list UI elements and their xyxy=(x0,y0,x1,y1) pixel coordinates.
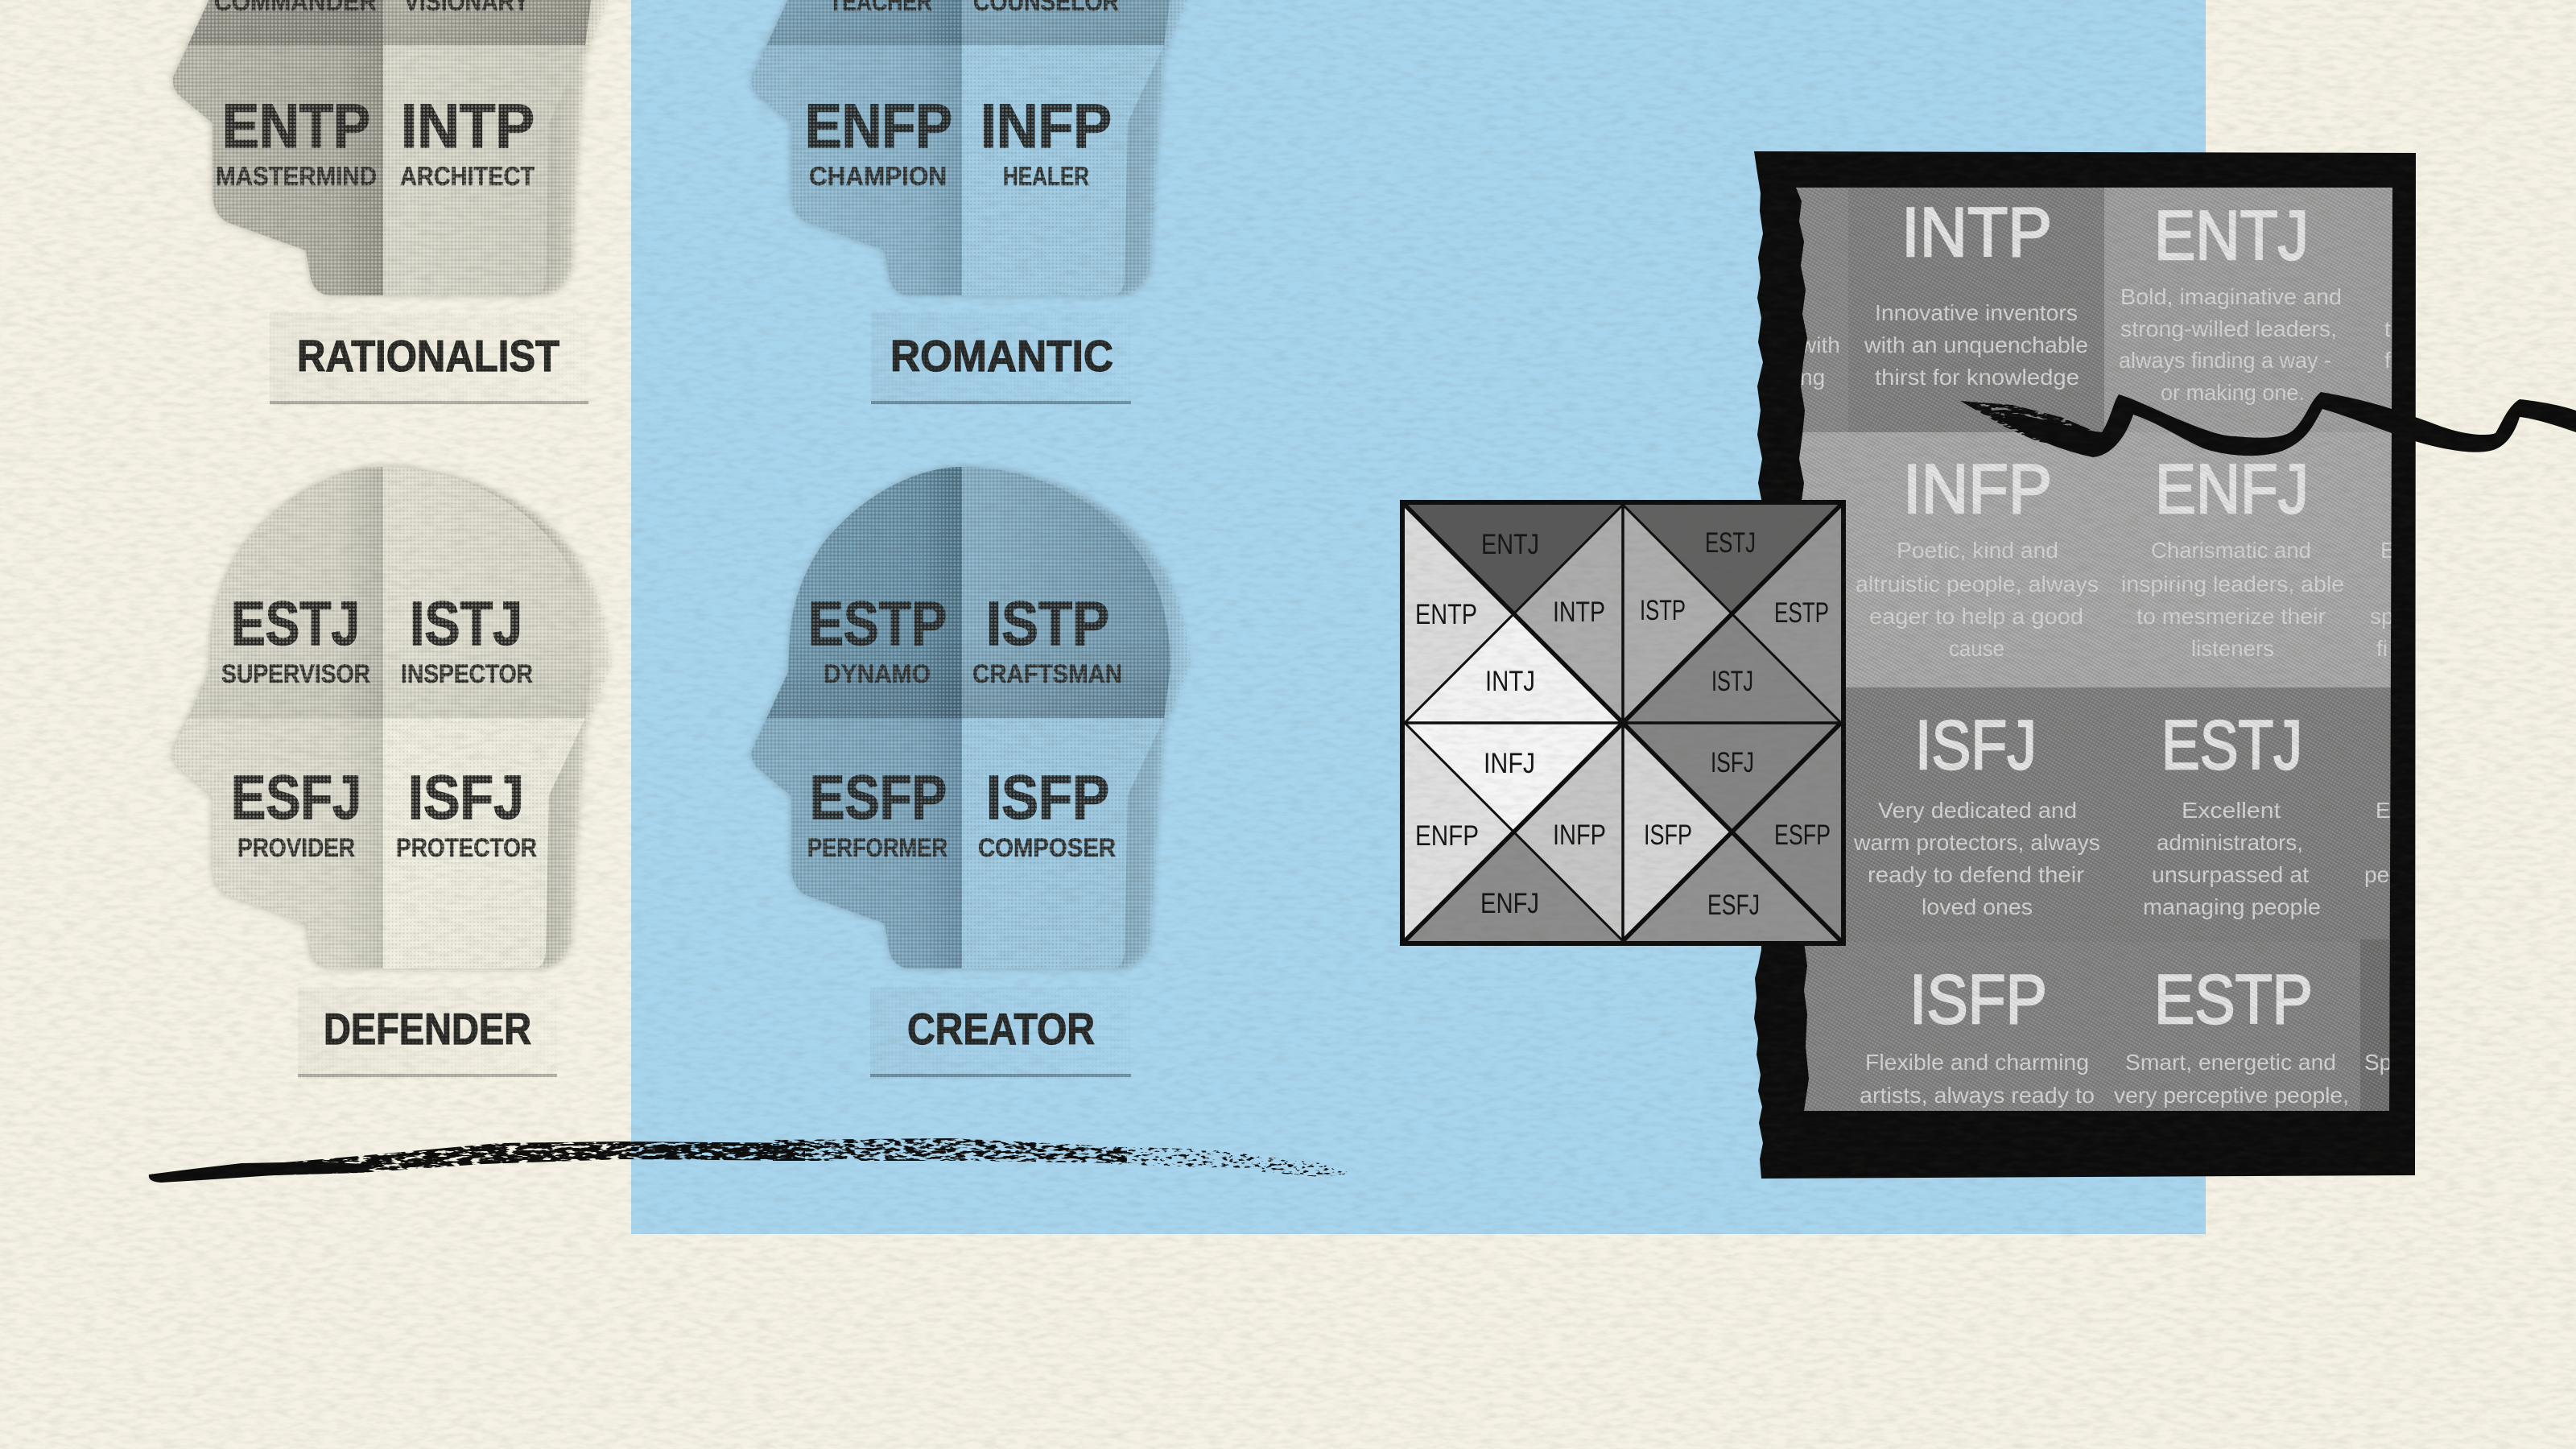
card: ISFJ: ISFJ xyxy=(1915,707,2037,784)
card: ENFJ: Charismatic and xyxy=(2151,538,2311,563)
label plate: DEFENDER: DEFENDER xyxy=(324,1004,531,1054)
type: INFP: INFP xyxy=(980,92,1112,161)
panel: romantic xyxy=(740,0,1203,405)
role: DYNAMO: DYNAMO xyxy=(824,659,931,688)
card: INFP xyxy=(1856,451,2099,661)
card: ISFJ: warm protectors, always xyxy=(1853,830,2100,855)
card: INFP: cause xyxy=(1949,636,2004,661)
card fragment: cut-off right column: fi xyxy=(2376,636,2388,661)
card: ESTP: ESTP xyxy=(2154,961,2313,1038)
head: rationalist silhouette xyxy=(161,0,625,303)
card: ENFJ: inspiring leaders, able xyxy=(2121,572,2344,597)
card: ESTP xyxy=(2114,961,2349,1108)
card: INTP: thirst for knowledge xyxy=(1875,365,2079,390)
role: ARCHITECT: ARCHITECT xyxy=(400,162,535,191)
background panel: blue sheet xyxy=(631,0,2206,1234)
card: ISFP: Flexible and charming xyxy=(1865,1050,2089,1075)
chart: 16-type triangle matrix xyxy=(1400,500,1846,946)
card: ESTP: very perceptive people, xyxy=(2114,1083,2349,1108)
quadrant: top right triangles xyxy=(1623,505,1841,723)
card fragment: cut-off right column: E xyxy=(2380,538,2396,563)
label plate: RATIONALIST xyxy=(270,312,588,405)
card: INTP: INTP xyxy=(1901,194,2052,271)
panel: torn black card xyxy=(1754,151,2416,1179)
card: ISFJ: Very dedicated and xyxy=(1878,798,2077,823)
card: ENTJ: Bold, imaginative and xyxy=(2120,284,2342,309)
quadrant: top left triangles xyxy=(1405,505,1623,723)
role: SUPERVISOR: SUPERVISOR xyxy=(221,659,370,688)
role: CRAFTSMAN: CRAFTSMAN xyxy=(972,659,1122,688)
head: romantic silhouette xyxy=(740,0,1203,303)
card: INTP: Innovative inventors xyxy=(1875,300,2078,325)
head: defender silhouette xyxy=(161,459,625,976)
card: ESTJ: ESTJ xyxy=(2161,707,2302,784)
matrix label: ESTP: ESTP xyxy=(1774,597,1829,629)
role: COMPOSER: COMPOSER xyxy=(978,833,1116,862)
label plate: CREATOR: CREATOR xyxy=(907,1004,1095,1054)
matrix label: ISFP: ISFP xyxy=(1644,819,1692,851)
quadrant: bottom right triangles xyxy=(1623,723,1841,941)
role: PERFORMER: PERFORMER xyxy=(807,833,947,862)
role: CHAMPION: CHAMPION xyxy=(809,162,947,191)
card: INTP xyxy=(1864,194,2088,390)
card: ENFJ: listeners xyxy=(2191,636,2274,661)
card: ENTJ: always finding a way - xyxy=(2119,348,2331,373)
label plate: DEFENDER xyxy=(298,987,557,1079)
role: MASTERMIND: MASTERMIND xyxy=(216,162,377,191)
label plate: ROMANTIC: ROMANTIC xyxy=(890,331,1113,381)
panel: creator xyxy=(740,459,1203,1079)
matrix label: INFP: INFP xyxy=(1553,819,1606,851)
card fragment: cut-off left column: ng xyxy=(1800,365,1825,390)
matrix label: ESTJ: ESTJ xyxy=(1705,527,1756,559)
card fragment: cut-off right column: f xyxy=(2384,348,2391,373)
matrix label: ISTP: ISTP xyxy=(1640,595,1686,626)
quadrant: bottom left triangles xyxy=(1405,723,1623,941)
card: INFP: Poetic, kind and xyxy=(1897,538,2058,563)
matrix label: ENTP: ENTP xyxy=(1415,599,1477,630)
card backing: black torn sheet xyxy=(1754,151,2416,1179)
card: ESTJ: administrators, xyxy=(2157,830,2303,855)
label plate: RATIONALIST: RATIONALIST xyxy=(297,331,559,381)
type: ESTJ: ESTJ xyxy=(231,589,360,658)
card: ENFJ: to mesmerize their xyxy=(2136,604,2326,629)
role: PROTECTOR: PROTECTOR xyxy=(396,833,537,862)
type: ENTP: ENTP xyxy=(222,92,370,161)
card fragment: cut-off right column: Sp xyxy=(2364,1050,2392,1075)
card: INFP: eager to help a good xyxy=(1869,604,2083,629)
matrix label: INTJ: INTJ xyxy=(1485,666,1535,697)
card: INFP: altruistic people, always xyxy=(1856,572,2099,597)
card fragment: cut-off right column xyxy=(2364,316,2396,1075)
matrix label: ESFP: ESFP xyxy=(1774,819,1831,851)
card: ESTJ xyxy=(2143,707,2321,919)
matrix label: ISTJ: ISTJ xyxy=(1711,666,1753,697)
card: ESTJ: Excellent xyxy=(2182,798,2281,823)
type: ENFP: ENFP xyxy=(805,92,952,161)
type: ESFJ: ESFJ xyxy=(231,763,361,832)
card fragment: cut-off right column: t xyxy=(2384,316,2391,341)
card: ISFJ: loved ones xyxy=(1922,894,2033,919)
card: ENFJ xyxy=(2121,451,2344,661)
card: ESTJ: managing people xyxy=(2143,894,2321,919)
type: ISTP: ISTP xyxy=(986,589,1109,658)
type: ESTP: ESTP xyxy=(808,589,947,658)
role: INSPECTOR: INSPECTOR xyxy=(401,659,533,688)
card fragment: cut-off right column: E xyxy=(2376,798,2391,823)
matrix label: INFJ: INFJ xyxy=(1484,748,1535,779)
card: ENTJ xyxy=(2119,197,2342,405)
card: ESTP: Smart, energetic and xyxy=(2125,1050,2336,1075)
card: ISFP xyxy=(1860,961,2095,1108)
card: ISFJ: ready to defend their xyxy=(1868,862,2084,887)
brush stroke: wavy ink line xyxy=(1960,392,2576,457)
matrix label: ESFJ: ESFJ xyxy=(1707,890,1760,921)
card: INTP: with an unquenchable xyxy=(1864,332,2088,357)
matrix label: ENFP: ENFP xyxy=(1415,820,1479,852)
type: INTP: INTP xyxy=(401,92,535,161)
panel: rationalist xyxy=(161,0,625,405)
type: ESFP: ESFP xyxy=(810,763,947,832)
label plate: CREATOR xyxy=(870,987,1131,1079)
card: ENTJ: ENTJ xyxy=(2154,197,2309,275)
card: ENTJ: strong-willed leaders, xyxy=(2120,316,2337,341)
card: INFP: INFP xyxy=(1903,451,2052,528)
card: ENTJ: or making one. xyxy=(2161,380,2305,405)
brush stroke: dry horizontal ink sweep xyxy=(149,1138,1352,1183)
card: ISFP: ISFP xyxy=(1909,961,2047,1038)
role: PROVIDER: PROVIDER xyxy=(237,833,355,862)
card grid: type descriptions xyxy=(1787,181,2402,1115)
matrix label: ENFJ: ENFJ xyxy=(1480,888,1539,919)
matrix label: ENTJ: ENTJ xyxy=(1481,529,1539,560)
panel: defender xyxy=(161,459,625,1079)
matrix label: INTP: INTP xyxy=(1553,597,1605,628)
card: ESTJ: unsurpassed at xyxy=(2152,862,2309,887)
type: ISFP: ISFP xyxy=(986,763,1109,832)
card fragment: cut-off left column: with xyxy=(1799,332,1840,357)
label plate: ROMANTIC xyxy=(871,312,1131,405)
card: ISFP: artists, always ready to xyxy=(1860,1083,2095,1108)
card: ENFJ: ENFJ xyxy=(2155,451,2309,528)
card: ISFJ xyxy=(1853,707,2100,919)
type: ISTJ: ISTJ xyxy=(410,589,522,658)
card fragment: cut-off left column xyxy=(1799,332,1840,390)
matrix label: ISFJ: ISFJ xyxy=(1711,747,1754,778)
card fragment: cut-off right column: pe xyxy=(2364,862,2389,887)
type: ISFJ: ISFJ xyxy=(408,763,524,832)
card fragment: cut-off right column: sp xyxy=(2370,604,2394,629)
head: creator silhouette xyxy=(740,459,1203,976)
role: HEALER: HEALER xyxy=(1003,162,1089,191)
